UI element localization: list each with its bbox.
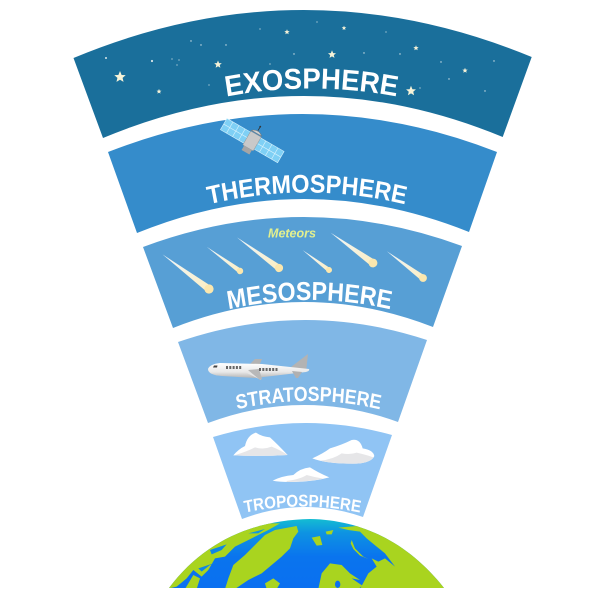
icon: airplane [208,354,309,380]
panel: mesosphere [143,217,462,328]
panel: exosphere [74,10,532,138]
meteors [160,229,428,295]
land: right continents [312,526,448,589]
label: stratosphere: STRATOSPHERE [236,386,382,410]
label: exosphere: EXOSPHERE [225,68,398,96]
label: meteors: Meteors [268,226,316,240]
land: left continents [167,523,298,589]
panel: stratosphere [178,320,427,423]
icon: clouds [233,433,374,482]
label: mesosphere: MESOSPHERE [227,282,392,310]
earth globe [167,519,448,589]
stars [105,21,495,95]
panel: thermosphere [108,114,497,233]
label: thermosphere: THERMOSPHERE [206,174,408,204]
icon: satellite [217,109,289,169]
panel: troposphere [213,423,392,519]
label: troposphere: TROPOSPHERE [243,494,361,512]
